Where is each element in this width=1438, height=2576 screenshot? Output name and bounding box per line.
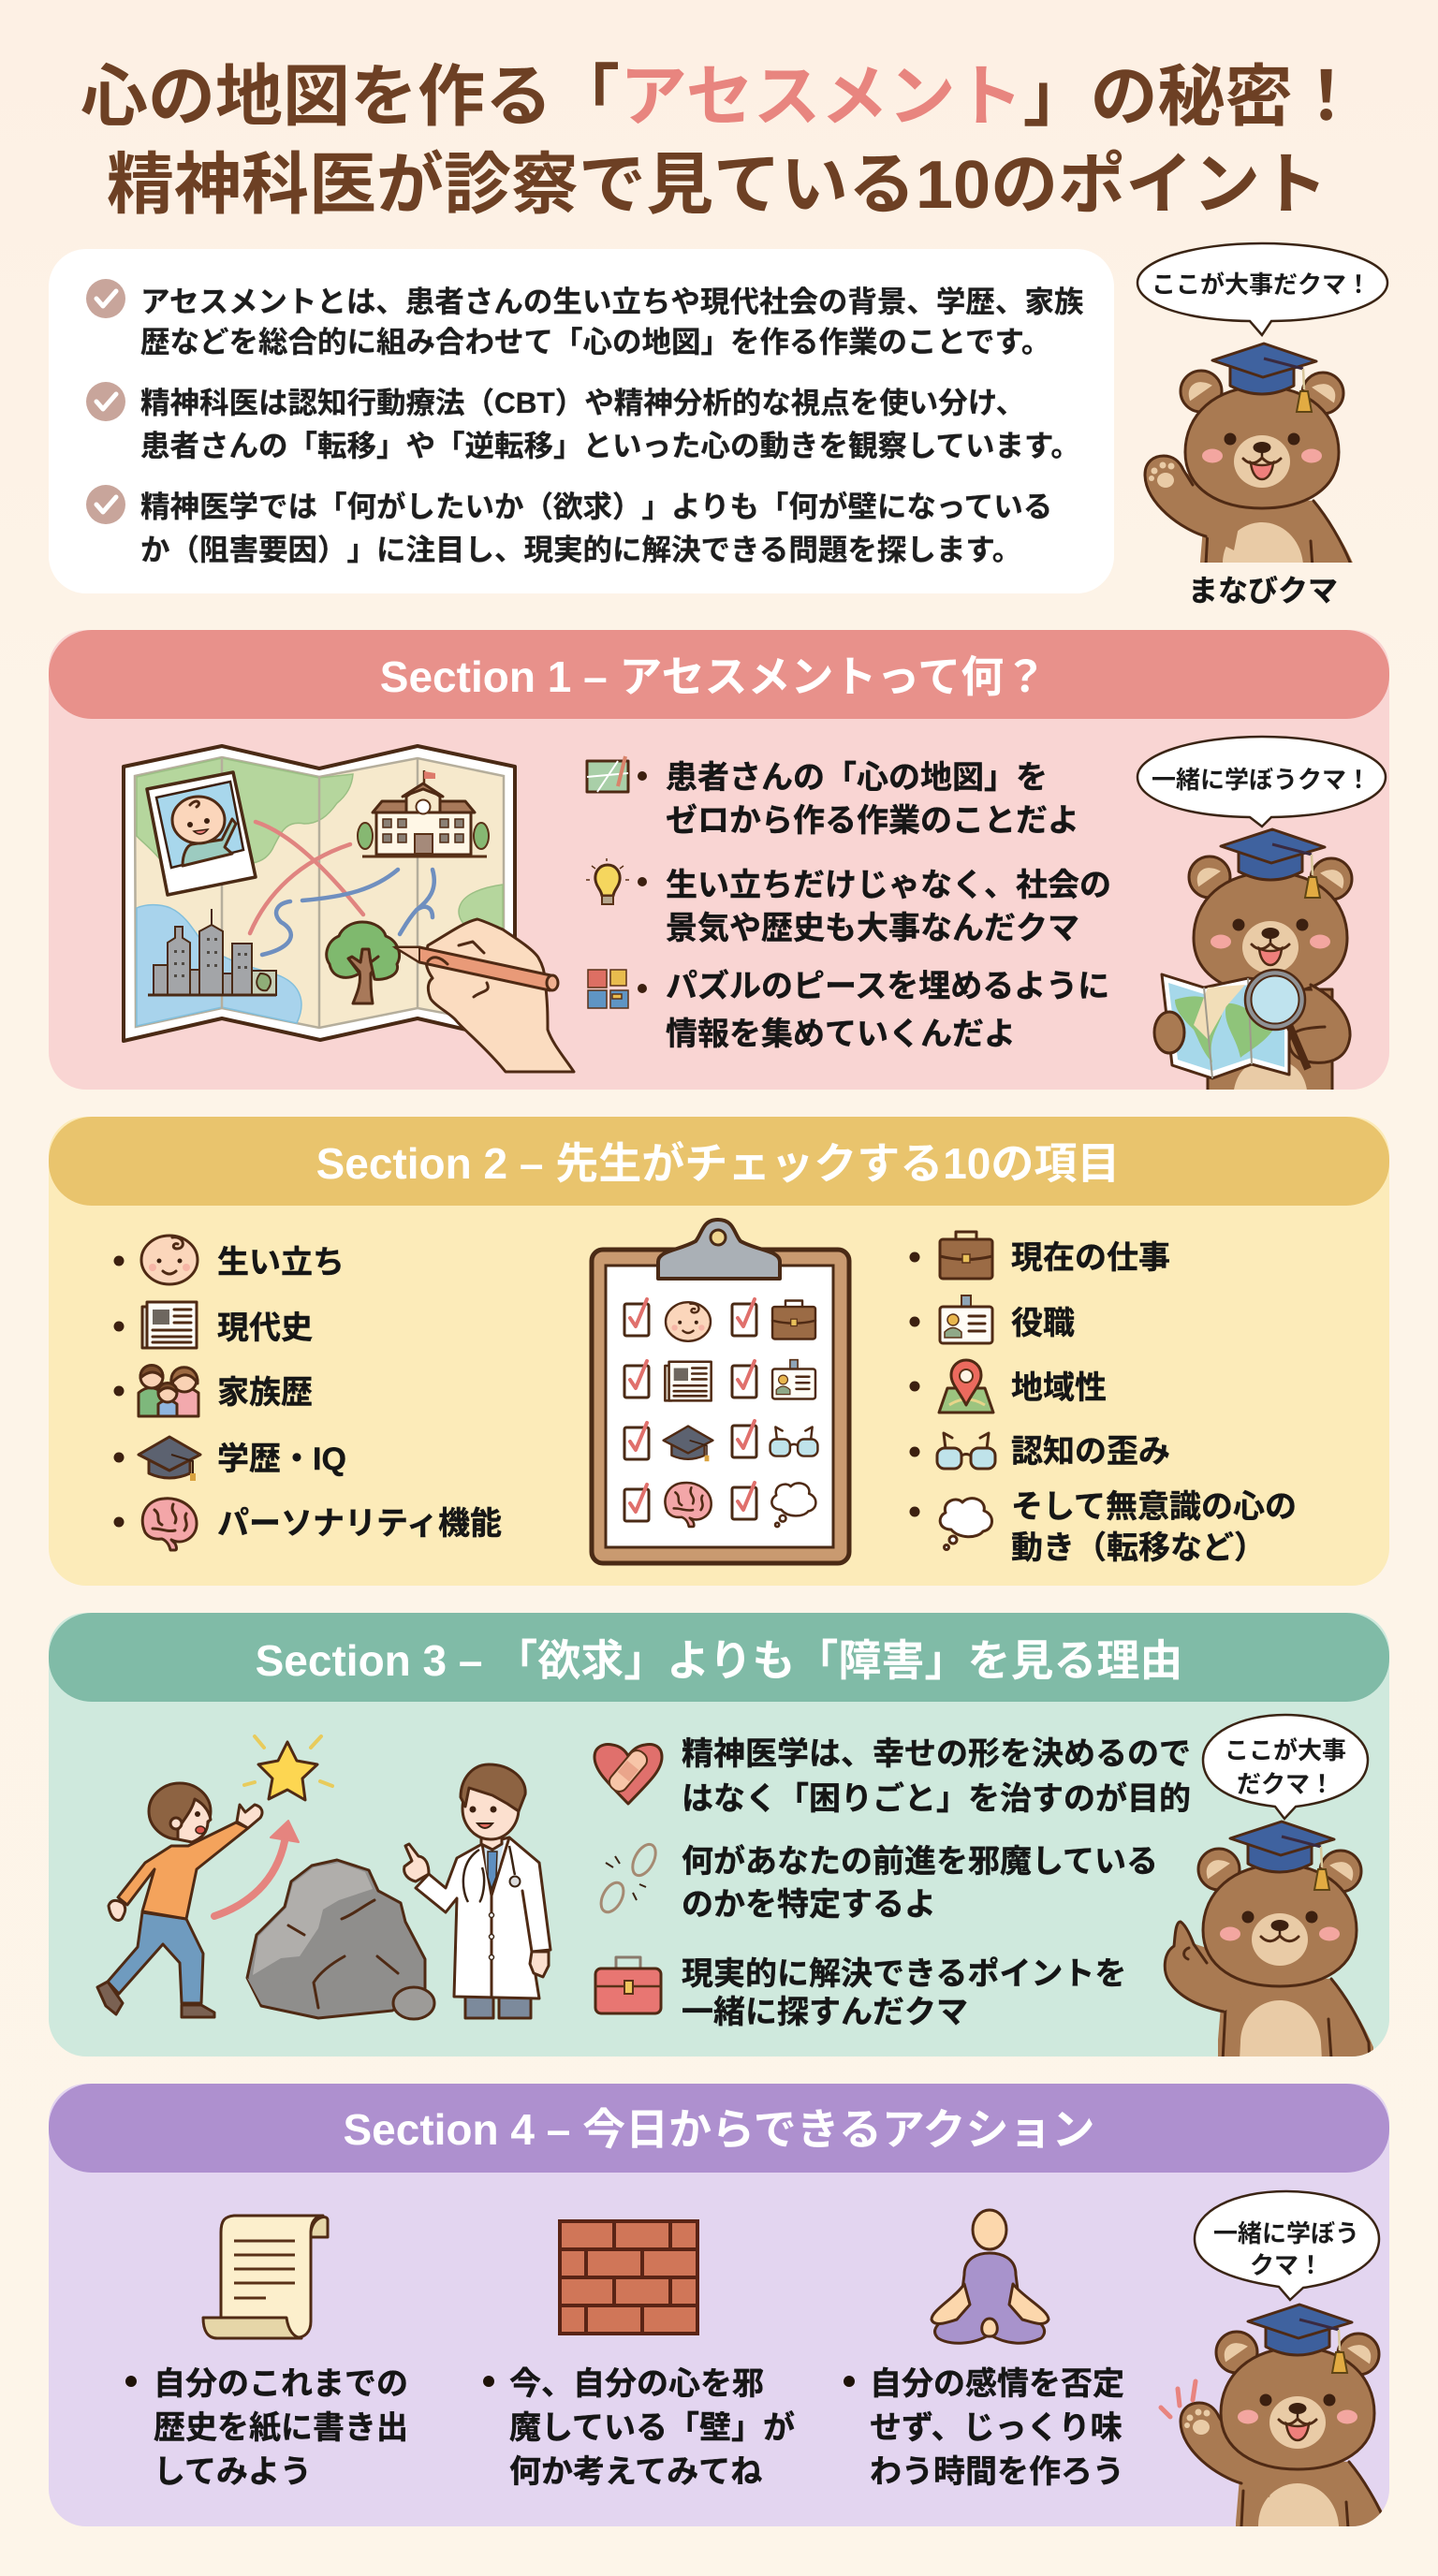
item: region [910,1360,1107,1412]
item: family history [114,1365,313,1416]
section 4 header [49,2084,1389,2173]
check icon 3 [86,485,125,524]
photo of baby [147,772,256,895]
item: upbringing [114,1236,345,1284]
intro text 2: 患者さんの「転移」や「逆転移」といった心の動きを観察しています。 [140,429,1080,462]
section 3 text 1 [682,1736,1191,1817]
bear name: まなびクマ [1188,574,1338,607]
action text 1 [125,2366,408,2490]
item: cognitive distortion: 認知の歪み [1011,1434,1170,1470]
intro text 3: 精神医学では「何がしたいか（欲求）」よりも「何が壁になっている [140,490,1052,523]
icon: brick wall [560,2221,697,2334]
illustration: star and arrow [214,1736,332,1916]
speech bubble: section 3: ここが大事 [1225,1736,1346,1764]
character: study bear [1144,343,1353,563]
item: region: 地域性 [1011,1370,1107,1406]
item: position [910,1295,1075,1343]
list: left items [114,1236,502,1550]
icon: broken chain [596,1840,660,1916]
intro text 1 [140,285,1084,359]
section 1 title: Section 1 – アセスメントって何？ [380,652,1047,701]
section 3 text 1: 精神医学は、幸せの形を決めるので [682,1736,1191,1772]
speech bubble: intro: ここが大事だクマ！ [1152,271,1371,299]
item: current job: 現在の仕事 [1011,1240,1170,1276]
section 3 title: Section 3 – 「欲求」よりも「障害」を見る理由 [256,1636,1182,1685]
action text 3: せず、じっくり味 [870,2410,1123,2446]
item: personality: パーソナリティ機能 [217,1506,502,1542]
character: pointing bear [1163,1820,1373,2056]
title: 精神科医が診察で見ている10のポイント [107,148,1328,223]
illustration: folded map [124,746,574,1072]
panel: section 2 [49,1117,1389,1586]
speech bubble: section 3 [1203,1715,1368,1819]
item: modern history: 現代史 [217,1310,313,1346]
section 3 header [49,1613,1389,1702]
section 3 text 3 [682,1956,1126,2030]
panel: section 4 [49,2084,1389,2526]
action text 3: 自分の感情を否定 [870,2366,1124,2402]
action text 3 [844,2366,1124,2490]
section 3 text 2 [682,1843,1158,1923]
icon: scroll [203,2216,328,2338]
item: unconscious: 動き（転移など） [1011,1530,1266,1566]
bullet text 1: 患者さんの「心の地図」を [666,760,1048,796]
section 2 title: Section 2 – 先生がチェックする10の項目 [316,1139,1120,1188]
section 3 text 2: 何があなたの前進を邪魔している [682,1843,1158,1880]
item: current job [910,1232,1170,1279]
bullet text 3: パズルのピースを埋めるように [666,968,1109,1004]
city skyline [148,909,276,995]
icon: light bulb [586,858,629,904]
action text 2: 魔している「壁」が [509,2409,795,2446]
paw [1154,1012,1184,1053]
section 2 header [49,1117,1389,1206]
item: unconscious [910,1489,1297,1566]
speech bubble: section 4: クマ！ [1250,2251,1323,2279]
illustration: doctor [404,1764,550,2018]
icon: heart with bandage [594,1745,662,1804]
map held by bear [1162,974,1289,1078]
roads and rivers [250,822,434,955]
item: unconscious: そして無意識の心の [1011,1489,1297,1525]
illustration: person reaching [97,1783,262,2017]
item: education and IQ [114,1437,346,1481]
icon: puzzle [588,970,628,1008]
item: upbringing: 生い立ち [217,1245,345,1281]
section 3 text 3: 現実的に解決できるポイントを [682,1956,1126,1992]
intro text 2: 精神科医は認知行動療法（CBT）や精神分析的な視点を使い分け、 [140,386,1025,419]
intro text 2 [140,386,1080,462]
speech bubble: intro [1137,243,1387,335]
section 3 text 3: 一緒に探すんだクマ [682,1995,968,2030]
item: personality [114,1499,502,1550]
item: education and IQ: 学歴・IQ [217,1442,346,1477]
icon: meditating person [932,2210,1049,2343]
section 3 text 1: はなく「困りごと」を治すのが目的 [682,1780,1191,1817]
character: bear with map [1154,829,1352,1102]
sparks near waving bear [1161,2381,1196,2417]
illustration: rock [247,1860,434,2019]
bullet text 3: 情報を集めていくんだよ [666,1017,1016,1052]
action text 2: 何か考えてみてね [509,2454,762,2490]
illustration: clipboard [592,1220,849,1563]
action text 2 [483,2366,795,2490]
action text 3: わう時間を作ろう [870,2454,1124,2490]
tree [327,922,400,1003]
item: modern history [114,1302,313,1348]
item: cognitive distortion [910,1433,1170,1470]
bullet text 1: ゼロから作る作業のことだよ [666,803,1079,839]
action text 1: 歴史を紙に書き出 [154,2410,408,2446]
speech bubble: section 1 [1137,737,1386,827]
bullet text 3 [638,968,1109,1052]
item: position: 役職 [1011,1306,1075,1341]
bullet text 2: 景気や歴史も大事なんだクマ [666,911,1079,946]
item: family history: 家族歴 [217,1375,313,1411]
intro text 3: か（阻害要因）」に注目し、現実的に解決できる問題を探します。 [140,533,1021,566]
action text 2: 今、自分の心を邪 [509,2366,764,2402]
icon: small map [587,756,628,792]
character: waving bear [1180,2303,1382,2526]
list: right items [910,1232,1297,1566]
speech bubble: section 4 [1195,2191,1379,2300]
speech bubble: section 1: 一緒に学ぼうクマ！ [1152,766,1371,794]
speech bubble: section 4: 一緒に学ぼう [1213,2219,1359,2247]
intro text 3 [140,490,1052,566]
action text 1: 自分のこれまでの [154,2366,408,2402]
speech bubble: section 3: だクマ！ [1237,1770,1334,1798]
panel: section 3 [49,1613,1389,2056]
icon: toolbox [595,1957,661,2013]
section 3 text 2: のかを特定するよ [682,1887,936,1923]
intro text 1: 歴などを総合的に組み合わせて「心の地図」を作る作業のことです。 [140,325,1050,359]
bullet text 2 [638,868,1111,946]
title [81,60,1360,223]
section 1 header [49,630,1389,719]
check icon 1 [86,279,125,318]
panel: section 1 [49,630,1391,2576]
bullet text 2: 生い立ちだけじゃなく、社会の [666,868,1111,903]
bullet text 1 [638,760,1079,839]
check icon 2 [86,382,125,421]
bear right arm [1289,985,1350,1062]
intro text 1: アセスメントとは、患者さんの生い立ちや現代社会の背景、学歴、家族 [140,285,1084,318]
action text 1: してみよう [154,2454,312,2490]
magnifier [1245,970,1308,1069]
school building [358,770,489,856]
hand with pencil [395,919,574,1072]
title: 心の地図を作る「アセスメント」の秘密！ [81,60,1360,135]
section 4 title: Section 4 – 今日からできるアクション [343,2105,1095,2154]
panel: introduction [49,249,1114,593]
